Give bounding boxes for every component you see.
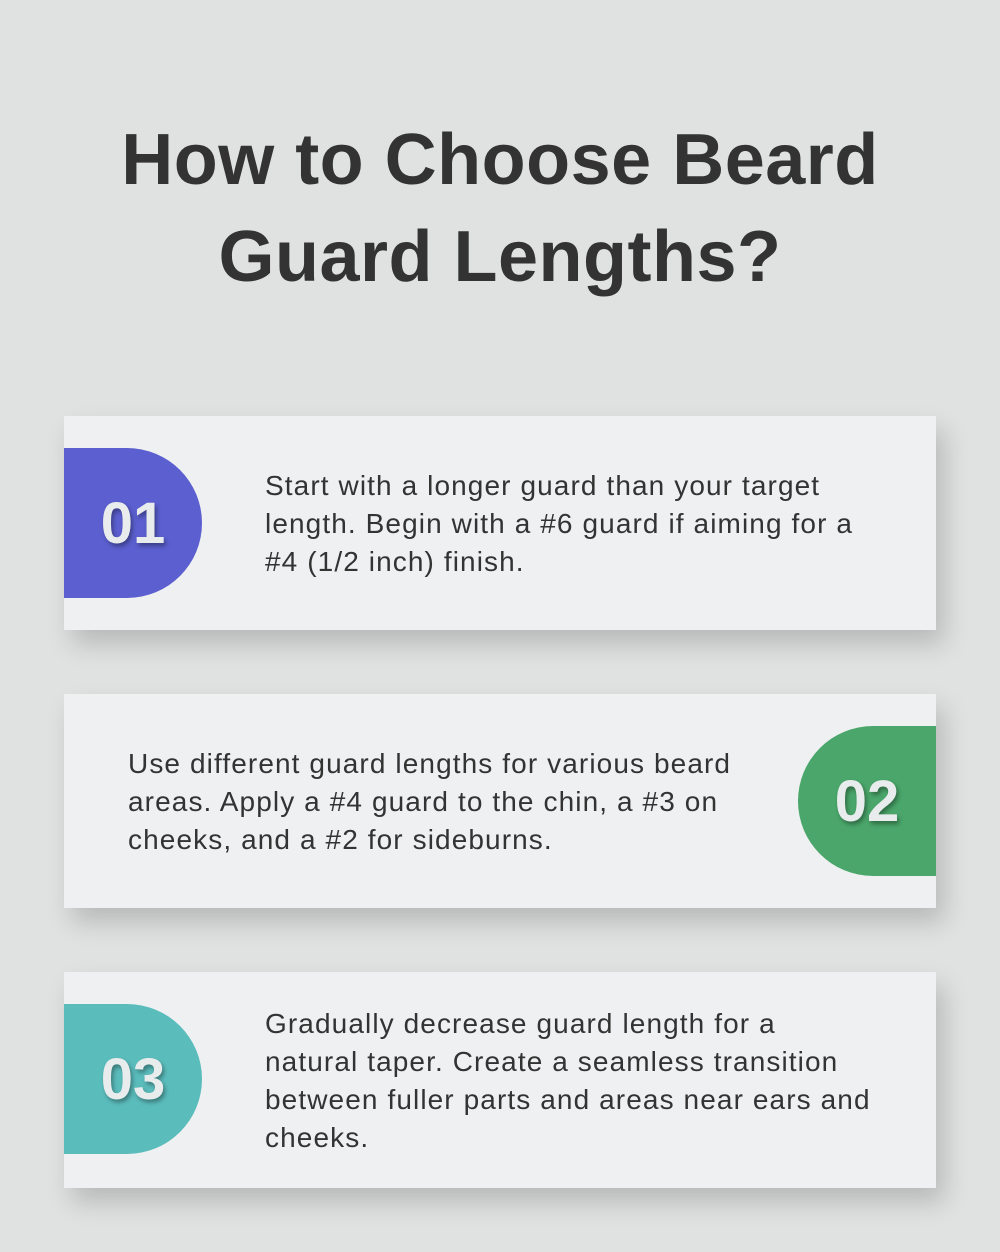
text: step 2 bbox=[128, 748, 731, 855]
text: step 3: between fuller parts and areas near ears and bbox=[265, 1084, 871, 1115]
panel: step 1 bbox=[64, 416, 936, 630]
title bbox=[121, 120, 879, 297]
badge: 03: 03 bbox=[101, 1046, 165, 1112]
title: How to Choose Beard bbox=[121, 120, 879, 200]
badge: 02 bbox=[798, 726, 936, 876]
title: Guard Lengths? bbox=[218, 217, 782, 297]
text: step 1: #4 (1/2 inch) finish. bbox=[265, 546, 525, 577]
text: step 3: Gradually decrease guard length for a bbox=[265, 1008, 776, 1039]
badge: 01 bbox=[64, 448, 202, 598]
text: step 2: areas. Apply a #4 guard to the chin, a #3 on bbox=[128, 786, 718, 817]
text: step 3: natural taper. Create a seamless transition bbox=[265, 1046, 838, 1077]
panel: step 3 bbox=[64, 972, 936, 1188]
text: step 1: length. Begin with a #6 guard if aiming for a bbox=[265, 508, 853, 539]
text: step 3: cheeks. bbox=[265, 1122, 369, 1153]
text: step 2: cheeks, and a #2 for sideburns. bbox=[128, 824, 553, 855]
badge: 01: 01 bbox=[101, 490, 165, 556]
text: step 1: Start with a longer guard than your target bbox=[265, 470, 820, 501]
panel: step 2 bbox=[64, 694, 936, 908]
badge: 02: 02 bbox=[835, 768, 899, 834]
text: step 1 bbox=[265, 470, 853, 577]
text: step 2: Use different guard lengths for various beard bbox=[128, 748, 731, 779]
badge: 03 bbox=[64, 1004, 202, 1154]
text: step 3 bbox=[265, 1008, 871, 1153]
